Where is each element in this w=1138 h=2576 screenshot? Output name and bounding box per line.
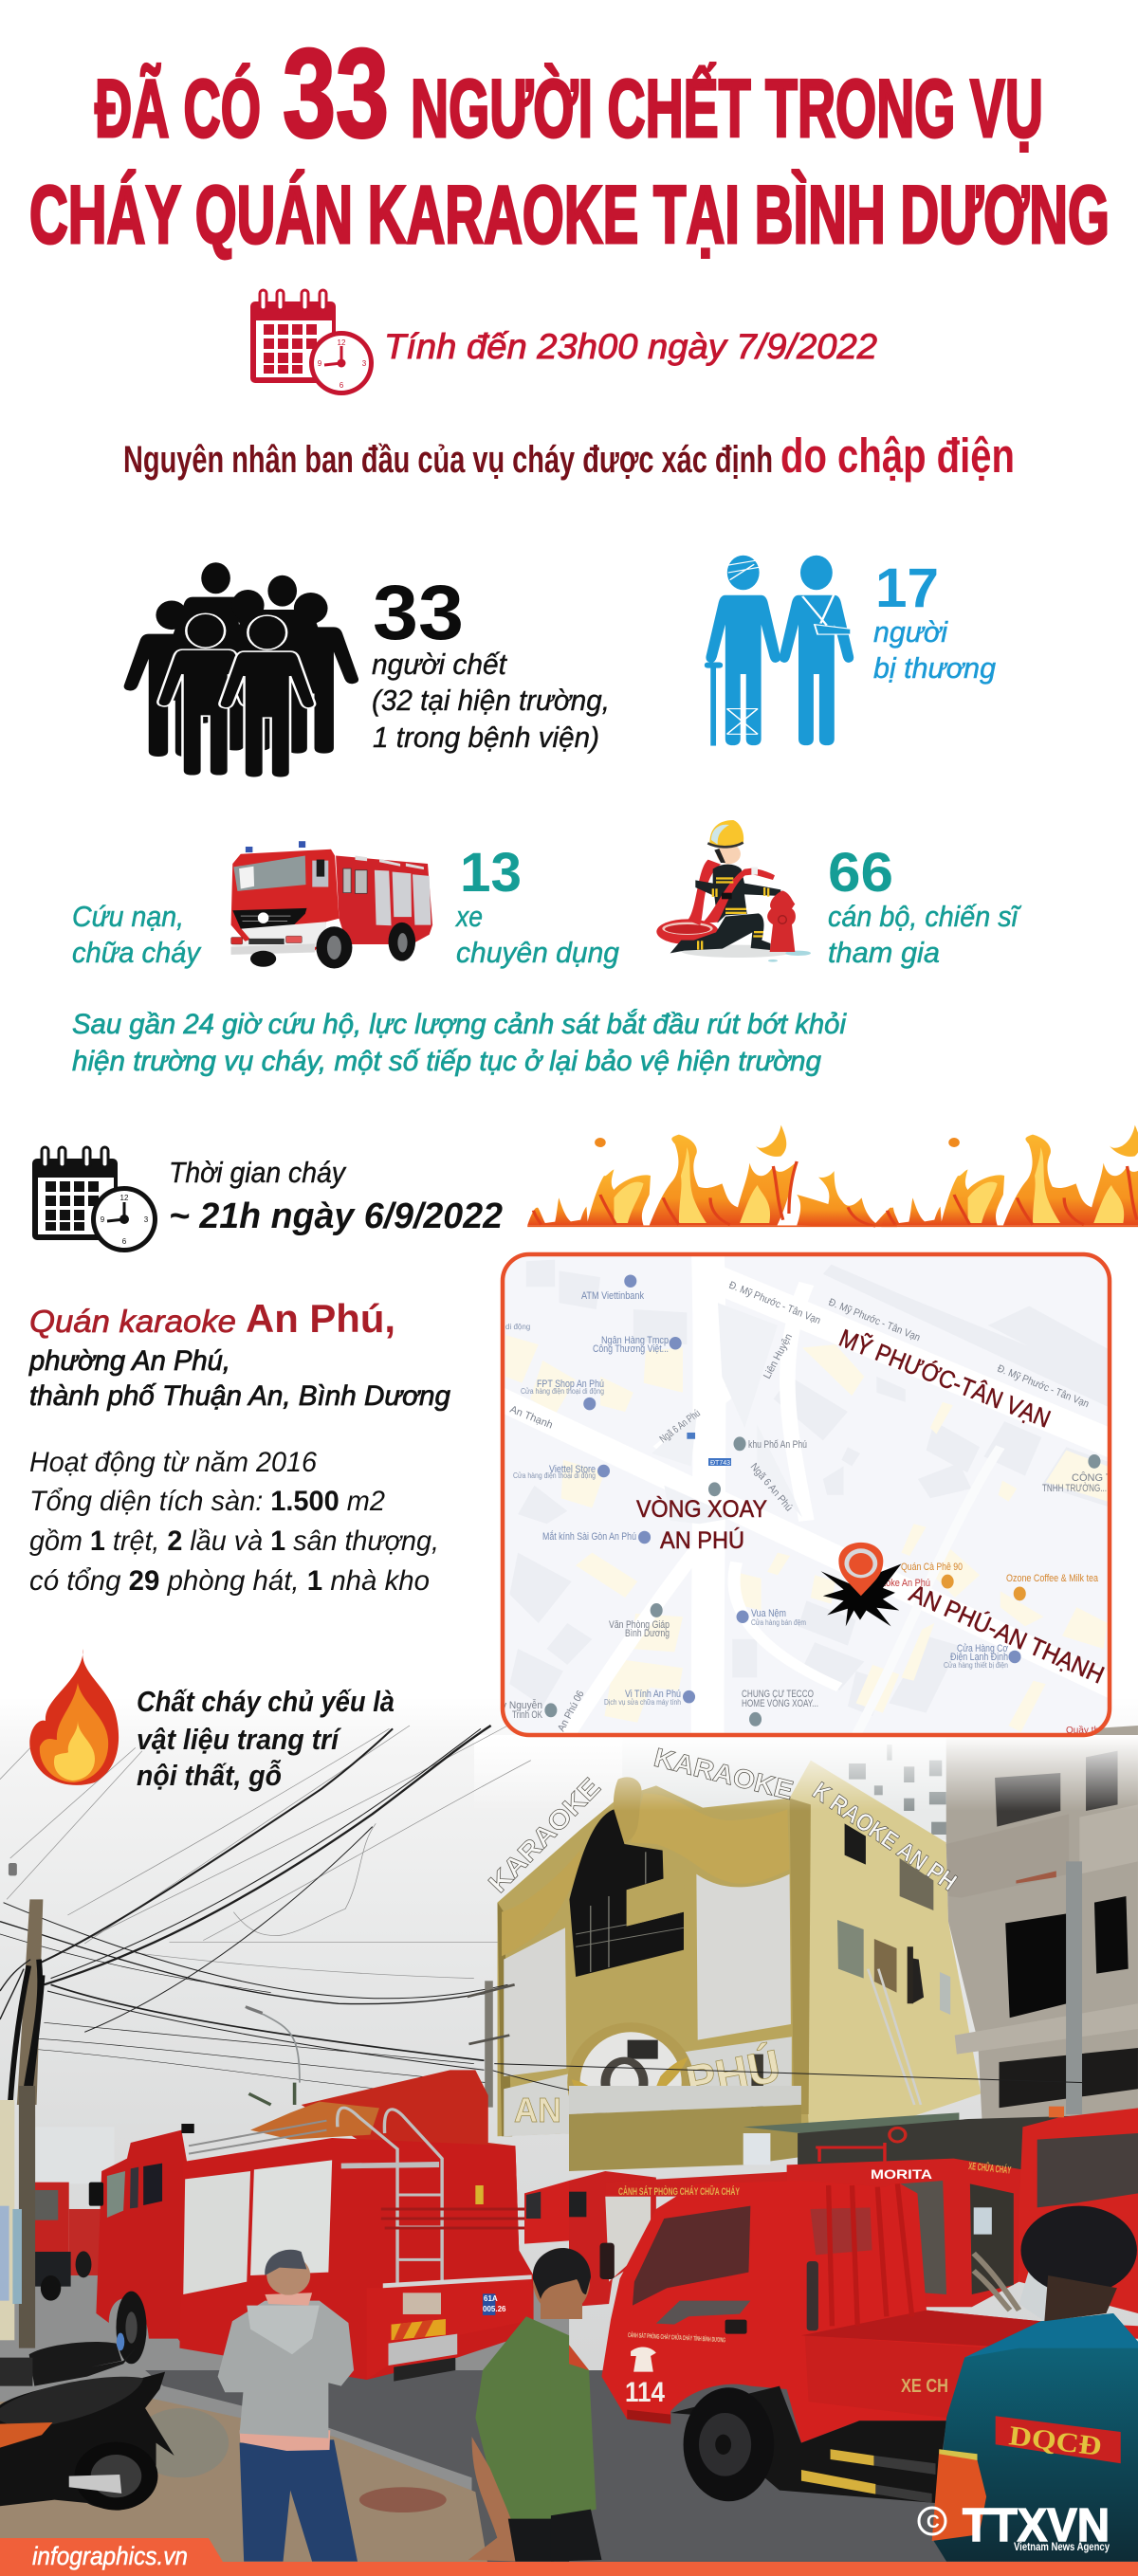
map place labels: Cửa hàng thiết bị điện xyxy=(944,1661,1008,1670)
fire material note: vật liệu trang trí xyxy=(137,1723,341,1756)
map place labels: An Thạnh xyxy=(508,1404,554,1432)
neighbouring concrete building xyxy=(946,1726,1138,2124)
map place labels: HOME VÒNG XOAY... xyxy=(742,1697,818,1709)
fire time: Thời gian cháy xyxy=(169,1156,347,1189)
stat: 66 officers xyxy=(828,842,1022,969)
title xyxy=(29,24,1110,261)
map place labels: Điện Lạnh Định xyxy=(950,1652,1008,1663)
building signage: KARAOKE xyxy=(652,1743,797,1805)
title: 33 xyxy=(283,24,389,164)
icon: black calendar with clock xyxy=(32,1147,157,1252)
icon: red calendar with clock: 9 xyxy=(318,359,322,368)
truck lettering: 61A xyxy=(484,2294,498,2303)
badge lettering: DQCĐ xyxy=(1007,2421,1103,2462)
map place labels: Quán Cà Phê 90 xyxy=(901,1562,963,1573)
fire time xyxy=(169,1156,503,1236)
map place labels: ATM Viettinbank xyxy=(581,1290,644,1302)
stat: 66 officers: cán bộ, chiến sĩ xyxy=(828,900,1022,933)
venue details: Hoạt động từ năm 2016 xyxy=(29,1447,317,1478)
map place labels: Đ. Mỹ Phước - Tân Vạn xyxy=(727,1280,822,1326)
truck lettering: CẢNH SÁT PHÒNG CHÁY CHỮA CHÁY xyxy=(618,2185,740,2198)
fade at the top of the photo xyxy=(608,1735,1138,1807)
venue details xyxy=(29,1447,439,1597)
venue description: phường An Phú, xyxy=(28,1345,230,1377)
stat: 33 dead: (32 tại hiện trường, xyxy=(372,684,610,717)
stat: 66 officers: tham gia xyxy=(828,936,940,969)
panel: location map xyxy=(493,1242,1120,1736)
map place labels: Mắt kính Sài Gòn An Phú xyxy=(542,1530,636,1543)
icon: fire truck xyxy=(231,841,432,969)
militia member in blue vest xyxy=(932,2206,1138,2562)
truck lettering: 005.26 xyxy=(483,2305,506,2313)
map place labels: khu Phố An Phú xyxy=(748,1439,807,1451)
teal note about withdrawal: Sau gần 24 giờ cứu hộ, lực lượng cảnh sát bắt đầu rút bớt khỏi xyxy=(72,1009,847,1040)
map place labels: Cửa hàng bán đệm xyxy=(751,1618,806,1627)
officer head xyxy=(533,2248,591,2319)
truck lettering: XE CH xyxy=(901,2376,948,2397)
map place labels: aoke An Phú xyxy=(881,1578,930,1589)
map blocks and roads xyxy=(493,1242,1120,1735)
venue description: thành phố Thuận An, Bình Dương xyxy=(29,1380,450,1412)
icon: black calendar with clock: 3 xyxy=(144,1215,149,1224)
ground: road and dirt xyxy=(0,2275,1138,2567)
white apartment tower xyxy=(687,1745,946,1835)
building signage xyxy=(483,1743,963,2129)
stat: 66 officers: 66 xyxy=(828,842,893,904)
truck lettering xyxy=(483,2160,1012,2408)
map place labels: Quầy th xyxy=(1066,1725,1099,1736)
map place labels: TNHH TRƯỜNG... xyxy=(1042,1482,1107,1494)
date note: Tính đến 23h00 ngày 7/9/2022 xyxy=(384,327,877,366)
map place labels: FPT Shop An Phú xyxy=(537,1379,604,1390)
icon: red calendar with clock: 3 xyxy=(362,359,367,368)
map place labels: Ngân Hàng Tmcp xyxy=(601,1335,669,1346)
map place labels: Vi Tính An Phú xyxy=(625,1689,681,1700)
cause statement: Nguyên nhân ban đầu của vụ cháy được xác định xyxy=(123,439,773,481)
rescue label xyxy=(72,900,202,969)
bystander in grey hoodie xyxy=(218,2250,358,2562)
icon: black calendar with clock: 6 xyxy=(122,1237,127,1246)
truck lettering: 114 xyxy=(625,2377,665,2408)
stat: 33 dead: người chết xyxy=(372,648,507,681)
TTXVN copyright logo: C xyxy=(927,2512,940,2532)
map place labels: Ozone Coffee & Milk tea xyxy=(1006,1573,1099,1584)
stat: 17 injured: 17 xyxy=(875,557,939,619)
teal note about withdrawal xyxy=(72,1009,847,1077)
title: ĐÃ CÓ xyxy=(95,64,261,155)
road and roundabout labels xyxy=(636,1324,1109,1690)
map place labels: Ngã 6 An Phú xyxy=(748,1461,795,1513)
venue details: Tổng diện tích sàn: 1.500 m2 xyxy=(29,1486,385,1517)
building signage: AN xyxy=(514,2091,561,2129)
road and roundabout labels: VÒNG XOAY xyxy=(636,1495,767,1523)
map place labels: CHUNG CƯ TECCO xyxy=(742,1689,814,1700)
overhead wires and poles xyxy=(0,1725,1082,2110)
venue description: An Phú, xyxy=(246,1296,395,1341)
stat: 13 vehicles: 13 xyxy=(460,842,522,904)
icon: red calendar with clock: 12 xyxy=(338,338,346,347)
map place labels: Đ. Mỹ Phước - Tân Vạn xyxy=(827,1297,922,1343)
map place labels: Công Thương Việt... xyxy=(593,1343,669,1355)
building xyxy=(498,1761,981,2138)
map place labels: Đ. Mỹ Phước - Tân Vạn xyxy=(996,1363,1091,1410)
stat: 13 vehicles: chuyên dụng xyxy=(456,936,619,969)
map place labels: Trinh OK xyxy=(512,1709,542,1721)
map place labels: Dịch vụ sửa chữa máy tính xyxy=(604,1698,681,1707)
side windows xyxy=(837,1920,864,1979)
building signage: PHÚ xyxy=(682,2039,784,2109)
stat: 13 vehicles xyxy=(454,842,619,969)
map marker dots xyxy=(544,1274,1100,1726)
map place labels: ĐT743 xyxy=(710,1460,730,1467)
map place labels: Vua Nệm xyxy=(751,1608,786,1619)
building signage: KARAOKE xyxy=(483,1772,606,1898)
icon: flame xyxy=(29,1649,119,1785)
icon: firefighter at hydrant xyxy=(656,820,811,962)
map place labels: Liên Huyện xyxy=(762,1332,795,1380)
footer bar: infographics.vn xyxy=(32,2542,188,2570)
map place labels xyxy=(502,1280,1120,1736)
road and roundabout labels: MỸ PHƯỚC-TÂN VẠN xyxy=(835,1324,1055,1434)
venue details: gồm 1 trệt, 2 lầu và 1 sân thượng, xyxy=(29,1526,439,1557)
map place labels: An Phú 06 xyxy=(556,1689,587,1733)
icon: injured people xyxy=(705,556,854,746)
icon: red calendar with clock: 6 xyxy=(340,381,344,390)
mesh panels xyxy=(504,1927,566,2076)
fire time: ~ 21h ngày 6/9/2022 xyxy=(169,1197,503,1236)
map place labels: Cửa Hàng Cơ xyxy=(957,1643,1008,1654)
fire material note: Chất cháy chủ yếu là xyxy=(137,1685,395,1718)
map place labels: Bình Dương xyxy=(625,1628,670,1639)
flames strip xyxy=(527,1125,1138,1226)
motorbikes xyxy=(0,2333,174,2511)
map place labels: Ngã 6 An Phú xyxy=(658,1408,703,1445)
TTXVN copyright logo: Vietnam News Agency xyxy=(1014,2540,1110,2553)
stat: 13 vehicles: xe xyxy=(454,900,483,933)
fire truck with 114 xyxy=(600,2181,1138,2503)
truck lettering: CẢNH SÁT PHÒNG CHÁY CHỮA CHÁY TỈNH BÌNH DƯƠNG xyxy=(628,2330,726,2344)
icon: red calendar with clock xyxy=(250,290,374,395)
burned windows xyxy=(569,1809,684,1977)
icon: black calendar with clock: 9 xyxy=(101,1215,105,1224)
rescue label: chữa cháy xyxy=(72,936,202,969)
truck lettering: MORITA xyxy=(871,2166,932,2182)
main rescue truck xyxy=(89,2070,569,2382)
fire material note xyxy=(137,1685,395,1792)
map place labels: Cửa hàng điện thoại di động xyxy=(513,1471,596,1480)
icon: black calendar with clock: 12 xyxy=(120,1194,129,1202)
map place labels: di động xyxy=(505,1323,530,1331)
stat: 33 dead xyxy=(372,570,610,754)
photo: burned karaoke building and fire trucks xyxy=(0,1697,1138,2567)
teal note about withdrawal: hiện trường vụ cháy, một số tiếp tục ở lại bảo vệ hiện trường xyxy=(72,1046,821,1077)
stat: 17 injured xyxy=(873,557,996,685)
truck lettering: XE CHỮA CHÁY xyxy=(968,2160,1012,2177)
venue description: Quán karaoke xyxy=(29,1304,236,1339)
venue details: có tổng 29 phòng hát, 1 nhà kho xyxy=(29,1565,430,1597)
stat: 33 dead: 1 trong bệnh viện) xyxy=(373,721,599,754)
icon: crowd of people xyxy=(124,562,358,777)
venue description xyxy=(28,1296,450,1412)
footer bar xyxy=(0,2538,1138,2576)
police officer in green uniform xyxy=(468,2248,601,2562)
background fire trucks left xyxy=(0,2086,101,2348)
building signage: K RAOKE AN PH xyxy=(808,1776,963,1896)
rescue label: Cứu nạn, xyxy=(72,900,184,933)
map place labels: Cửa hàng điện thoại di động xyxy=(521,1387,604,1396)
stat: 17 injured: bị thương xyxy=(873,651,996,685)
map place labels: y Nguyễn xyxy=(502,1699,542,1711)
arch and lower sign xyxy=(504,2037,792,2136)
stat: 33 dead: 33 xyxy=(373,570,464,656)
gold ornament xyxy=(502,1851,582,1956)
TTXVN copyright logo: TTXVN xyxy=(963,2500,1110,2551)
road and roundabout labels: AN PHÚ xyxy=(660,1526,744,1554)
road and roundabout labels: AN PHÚ-AN THẠNH xyxy=(906,1579,1109,1690)
map place labels: Viettel Store xyxy=(549,1464,596,1475)
location pin with explosion burst xyxy=(821,1543,901,1626)
fire material note: nội thất, gỗ xyxy=(137,1759,282,1792)
cause statement: do chập điện xyxy=(780,429,1015,483)
map place labels: CÔNG TY xyxy=(1072,1471,1120,1484)
map place labels: Văn Phòng Giáp xyxy=(609,1619,670,1631)
stat: 17 injured: người xyxy=(873,615,948,649)
back trucks centre xyxy=(569,2086,1138,2313)
